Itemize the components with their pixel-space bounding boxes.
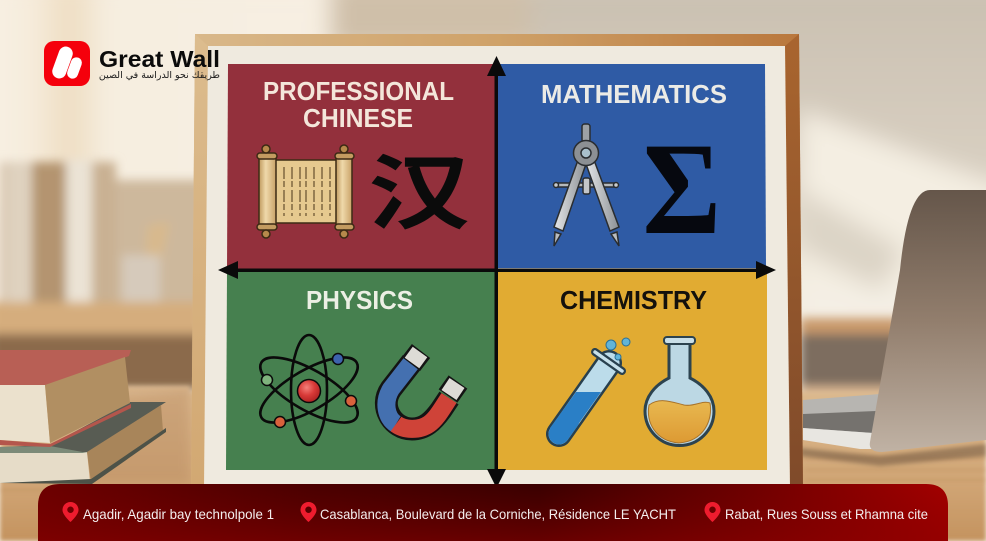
heading: professional chinese: PROFESSIONAL (263, 76, 454, 106)
location: rabat (704, 502, 928, 522)
arrow: left (218, 261, 238, 279)
laptop (803, 190, 986, 452)
icon: drawing compass (554, 124, 619, 246)
arrow: down (487, 469, 506, 488)
location: agadir: Agadir, Agadir bay technolpole 1 (83, 506, 274, 522)
heading: mathematics: MATHEMATICS (541, 79, 727, 109)
icon: round flask (645, 337, 714, 446)
logo wordmark: Great Wall (99, 46, 220, 72)
arrow: right (756, 261, 776, 279)
heading: physics: PHYSICS (306, 285, 413, 315)
wooden desk (0, 386, 986, 541)
footer bar (38, 484, 948, 541)
paper sheet (204, 46, 790, 490)
location: casablanca: Casablanca, Boulevard de la Corniche, Résidence LE YACHT (320, 506, 676, 522)
quadrant: physics (226, 272, 495, 470)
location: rabat: Rabat, Rues Souss et Rhamna cite (725, 506, 928, 522)
heading: professional chinese: CHINESE (303, 103, 413, 133)
icon: scroll (257, 145, 354, 238)
logo tagline: طريقك نحو الدراسة في الصين (99, 70, 220, 81)
icon: chinese character: 汉 (368, 127, 470, 246)
heading: chemistry: CHEMISTRY (560, 285, 707, 315)
icon: sigma: Σ (642, 117, 721, 262)
quadrant: professional chinese (227, 64, 495, 269)
axes with arrows (218, 56, 776, 488)
heading: professional chinese (263, 76, 454, 133)
icon: horseshoe magnet (386, 351, 458, 429)
wooden board (191, 34, 803, 490)
icon: atom (251, 335, 367, 445)
blurred bookshelf (0, 160, 900, 400)
logo (44, 41, 220, 86)
logo mark (44, 41, 90, 86)
stacked books (0, 350, 166, 484)
quadrant: chemistry (498, 272, 767, 470)
location: agadir (62, 502, 274, 522)
quadrant: mathematics (498, 64, 766, 268)
icon: test tube (550, 338, 630, 440)
arrow: up (487, 56, 506, 76)
